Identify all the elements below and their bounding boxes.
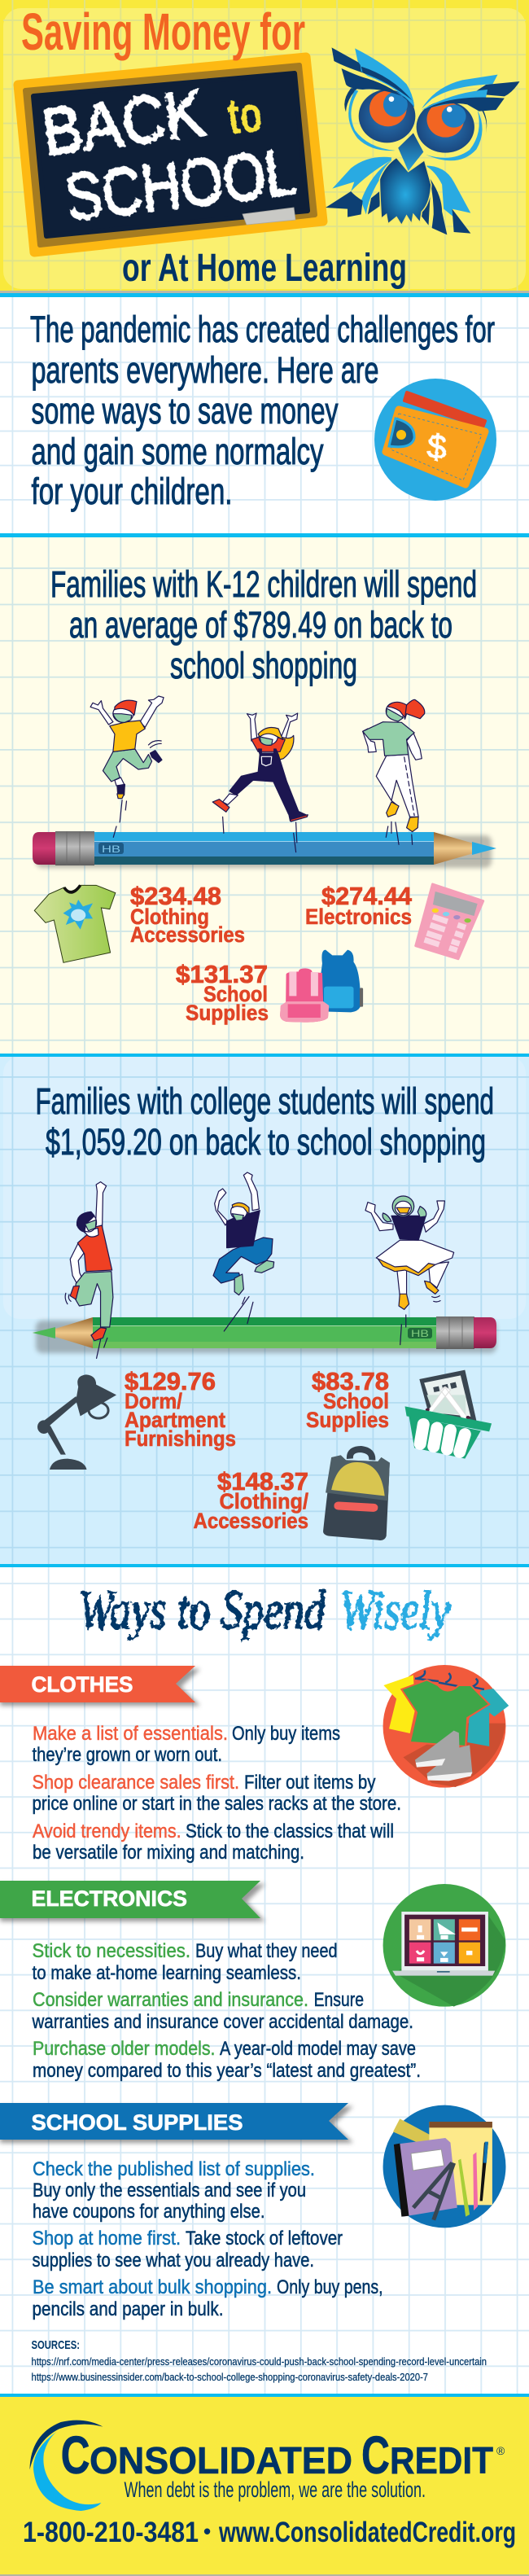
icon: wallet bbox=[374, 379, 496, 501]
electronics tips: money compared to this year’s “latest and greatest”. bbox=[33, 2060, 421, 2082]
electronics tips: Purchase older models. bbox=[33, 2038, 215, 2060]
electronics tips bbox=[32, 1940, 421, 2082]
sources: https://www.businessinsider.com/back-to-school-college-shopping-coronavirus-safety-deals-2020-7 bbox=[31, 2371, 428, 2383]
intro text bbox=[30, 309, 495, 512]
heading: ways to spend wisely: Wisely bbox=[339, 1579, 451, 1641]
subtitle: or at home learning: or At Home Learning bbox=[122, 247, 407, 290]
stat: clothing: Clothing/ bbox=[220, 1489, 308, 1514]
title: saving money for: Saving Money for bbox=[21, 2, 305, 61]
stat: clothing accessories bbox=[130, 882, 245, 947]
stat: electronics bbox=[305, 882, 413, 929]
icon: calculator bbox=[416, 884, 483, 959]
electronics tips: Stick to necessities. bbox=[33, 1940, 190, 1962]
logo: consolidated credit: C bbox=[361, 2425, 390, 2485]
banner: clothes bbox=[0, 1666, 200, 1706]
icon: desk lamp bbox=[37, 1374, 116, 1470]
child three bbox=[363, 699, 425, 844]
logo: consolidated credit: ONSOLIDATED bbox=[90, 2439, 352, 2482]
electronics tips: to make at-home learning seamless. bbox=[33, 1962, 301, 1984]
panel: k-12 spending background bbox=[0, 537, 529, 1054]
stat: clothing: $148.37 bbox=[217, 1467, 308, 1496]
icon: laptop bbox=[383, 1884, 505, 2007]
figures: k-12 children bbox=[90, 696, 425, 852]
figures: college students bbox=[65, 1172, 454, 1358]
clothes tips: Filter out items by bbox=[244, 1772, 376, 1794]
clothes tips: price online or start in the sales racks at the store. bbox=[33, 1793, 401, 1815]
clothes tips: Make a list of essentials. bbox=[33, 1723, 228, 1745]
chalk text: to: to bbox=[225, 86, 264, 146]
sources: SOURCES: bbox=[31, 2338, 80, 2352]
student one bbox=[65, 1182, 113, 1358]
electronics tips: Buy what they need bbox=[195, 1940, 338, 1962]
stat: dorm furnishings: Dorm/ bbox=[125, 1389, 182, 1413]
clothes tips: Shop clearance sales first. bbox=[33, 1772, 239, 1794]
intro text: parents everywhere. Here are bbox=[31, 349, 379, 391]
clothes tips: they’re grown or worn out. bbox=[33, 1744, 222, 1766]
panel: intro background bbox=[0, 293, 529, 537]
clothes tips: Avoid trendy items. bbox=[33, 1820, 181, 1842]
pencil label: HB bbox=[411, 1328, 429, 1339]
student two bbox=[213, 1172, 274, 1331]
college heading bbox=[36, 1080, 494, 1163]
school supplies tips: Be smart about bulk shopping. bbox=[33, 2276, 272, 2298]
pencil: blue bbox=[33, 831, 496, 868]
icon: basket with calculator bbox=[405, 1370, 492, 1459]
icon: dark backpack bbox=[323, 1449, 390, 1540]
k-12 heading bbox=[50, 563, 477, 686]
clothes tips bbox=[33, 1723, 401, 1864]
clothes tips: Only buy items bbox=[232, 1723, 340, 1745]
panel: tips background bbox=[0, 1567, 529, 2394]
banner: electronics bbox=[0, 1881, 265, 1921]
stat: electronics: $274.44 bbox=[321, 882, 413, 910]
contact line: 1-800-210-3481 bbox=[23, 2517, 199, 2548]
heading: ways to spend wisely: Ways to Spend bbox=[78, 1579, 326, 1641]
panel: college spending background bbox=[0, 1054, 529, 1567]
school supplies tips: Buy only the essentials and see if you bbox=[33, 2180, 306, 2201]
stat: clothing accessories: Accessories bbox=[130, 922, 245, 947]
stat: school supplies: $131.37 bbox=[176, 960, 268, 988]
electronics tips: Consider warranties and insurance. bbox=[33, 1989, 308, 2011]
stat: college school supplies: $83.78 bbox=[312, 1367, 389, 1395]
k-12 heading: school shopping bbox=[170, 645, 357, 686]
school supplies tips: Check the published list of supplies. bbox=[33, 2158, 315, 2180]
chalk text: back: BACK bbox=[38, 76, 209, 170]
school supplies tips: supplies to see what you already have. bbox=[33, 2250, 314, 2272]
clothes tips: Stick to the classics that will bbox=[186, 1820, 394, 1842]
stat: school supplies: Supplies bbox=[186, 1001, 269, 1025]
stat: school supplies bbox=[176, 960, 269, 1025]
electronics tips: Ensure bbox=[314, 1989, 364, 2011]
stat: electronics: Electronics bbox=[305, 905, 412, 929]
banner: school supplies: SCHOOL SUPPLIES bbox=[31, 2110, 243, 2135]
stat: college school supplies: School bbox=[323, 1389, 389, 1413]
stat: college school supplies: Supplies bbox=[306, 1408, 389, 1432]
intro text: some ways to save money bbox=[31, 390, 339, 432]
stat: college school supplies bbox=[306, 1367, 389, 1432]
intro text: and gain some normalcy bbox=[31, 431, 324, 472]
logo: consolidated credit: C bbox=[61, 2425, 90, 2485]
stat: clothing accessories: Clothing bbox=[130, 905, 209, 929]
school supplies tips: Shop at home first. bbox=[33, 2228, 181, 2250]
contact line bbox=[23, 2517, 516, 2548]
child one bbox=[90, 696, 164, 837]
panel: header background bbox=[0, 0, 529, 293]
electronics tips: warranties and insurance cover accidental damage. bbox=[32, 2011, 413, 2033]
icon: clothes on hangers bbox=[383, 1665, 509, 1788]
icon: owl mascot bbox=[326, 47, 519, 234]
school supplies tips bbox=[33, 2158, 383, 2320]
stat: dorm furnishings: Apartment bbox=[125, 1408, 225, 1432]
stat: dorm furnishings bbox=[125, 1367, 236, 1451]
icon: t-shirt bbox=[34, 885, 116, 962]
student three bbox=[365, 1196, 454, 1345]
logo arcs bbox=[29, 2420, 103, 2511]
clothes tips: be versatile for mixing and matching. bbox=[33, 1842, 304, 1864]
stat: dorm furnishings: Furnishings bbox=[125, 1426, 236, 1451]
icon: backpacks bbox=[280, 950, 363, 1023]
banner: clothes: CLOTHES bbox=[31, 1672, 133, 1697]
chalk eraser bbox=[243, 208, 295, 225]
logo: consolidated credit bbox=[29, 2420, 505, 2511]
icon: school supplies bbox=[383, 2105, 505, 2228]
banner: electronics: ELECTRONICS bbox=[31, 1886, 187, 1911]
school supplies tips: Take stock of leftover bbox=[186, 2228, 343, 2250]
dollar sign: $ bbox=[426, 427, 448, 467]
pencil: green bbox=[33, 1316, 496, 1353]
school supplies tips: pencils and paper in bulk. bbox=[33, 2298, 223, 2320]
child two bbox=[212, 713, 308, 852]
stat: clothing: Accessories bbox=[194, 1509, 308, 1533]
stat: dorm furnishings: $129.76 bbox=[125, 1367, 216, 1395]
chalk text: school: SCHOOL bbox=[61, 134, 299, 235]
electronics tips: A year-old model may save bbox=[220, 2038, 416, 2060]
pencil label bbox=[408, 1328, 432, 1339]
logo: consolidated credit: ® bbox=[496, 2444, 505, 2457]
stat: school supplies: School bbox=[203, 982, 268, 1006]
intro text: for your children. bbox=[31, 471, 233, 512]
sources bbox=[31, 2338, 487, 2383]
panel: footer bbox=[0, 2394, 529, 2576]
stat: clothing accessories: $234.48 bbox=[130, 882, 221, 910]
banner: school supplies bbox=[0, 2103, 353, 2143]
contact line: • bbox=[203, 2519, 211, 2543]
logo: consolidated credit: REDIT bbox=[390, 2439, 493, 2482]
chalkboard bbox=[18, 57, 323, 252]
pencil label: HB bbox=[102, 843, 120, 855]
pencil label bbox=[98, 843, 124, 855]
school supplies tips: have coupons for anything else. bbox=[33, 2201, 265, 2223]
stat: clothing bbox=[194, 1467, 308, 1533]
school supplies tips: Only buy pens, bbox=[277, 2276, 383, 2298]
